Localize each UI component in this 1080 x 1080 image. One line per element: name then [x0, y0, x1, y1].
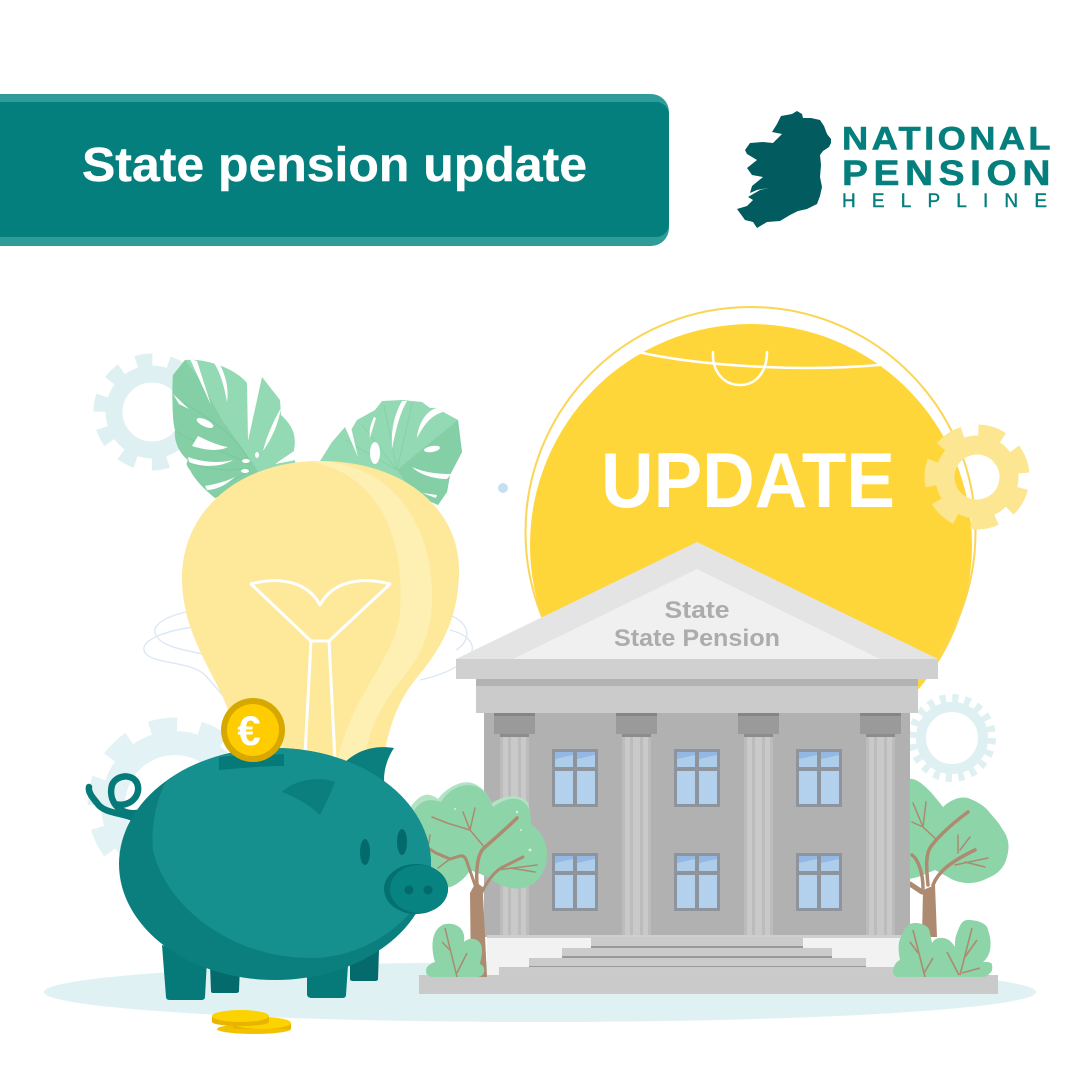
- piggy bank: [89, 698, 448, 1000]
- building columns: [494, 713, 901, 935]
- wordmark: NATIONAL: NATIONAL: [842, 120, 1054, 156]
- bulb filament: [251, 581, 390, 760]
- logo: National Pension Helpline: [737, 111, 1056, 228]
- cornice: [456, 659, 938, 679]
- building wall: [484, 713, 910, 937]
- pig ear: [340, 747, 394, 790]
- update circle: [526, 307, 976, 766]
- gear: lower left: [96, 726, 254, 884]
- euro coin: €: [237, 707, 261, 754]
- pig near legs: [162, 945, 207, 1000]
- coins on the ground: [212, 1010, 291, 1034]
- pediment text line two: State Pension: [614, 625, 780, 652]
- pig tail: [89, 776, 138, 820]
- pediment text: State: [664, 597, 730, 624]
- tree: left: [410, 782, 547, 977]
- gear: top left: [100, 360, 204, 464]
- ground shadow: [44, 962, 1036, 1022]
- entablature: [476, 686, 918, 713]
- icon: map of Ireland: [737, 111, 831, 228]
- pig body marking: [282, 779, 335, 815]
- tree: right: [905, 778, 1009, 937]
- title banner: [0, 94, 669, 246]
- building windows: [552, 749, 842, 911]
- light bulb: [182, 461, 459, 772]
- euro coin: [221, 698, 285, 762]
- steps: [419, 935, 998, 994]
- gear: yellow: [922, 422, 1032, 532]
- update word: UPDATE: [601, 436, 895, 524]
- illustration: [44, 307, 1036, 1034]
- bush: right: [893, 920, 992, 977]
- pig body: [119, 748, 431, 980]
- coin slot: [219, 754, 284, 770]
- bush: left: [426, 924, 484, 977]
- monstera leaf: right: [320, 400, 462, 505]
- wordmark: PENSION: PENSION: [842, 154, 1056, 193]
- roof pediment: [456, 542, 938, 659]
- pig snout: [384, 864, 448, 914]
- wordmark: HELPLINE: HELPLINE: [842, 191, 1047, 212]
- gear: right: [913, 699, 991, 777]
- swirl lines around bulb: [144, 612, 472, 716]
- small dot: [498, 483, 508, 493]
- decorative string on circle: [638, 352, 879, 385]
- monstera leaf: left: [172, 359, 296, 498]
- state pension building: [419, 542, 998, 994]
- title: State pension update: [82, 139, 587, 192]
- pig far legs: [210, 965, 240, 993]
- pig eyes: [360, 839, 370, 865]
